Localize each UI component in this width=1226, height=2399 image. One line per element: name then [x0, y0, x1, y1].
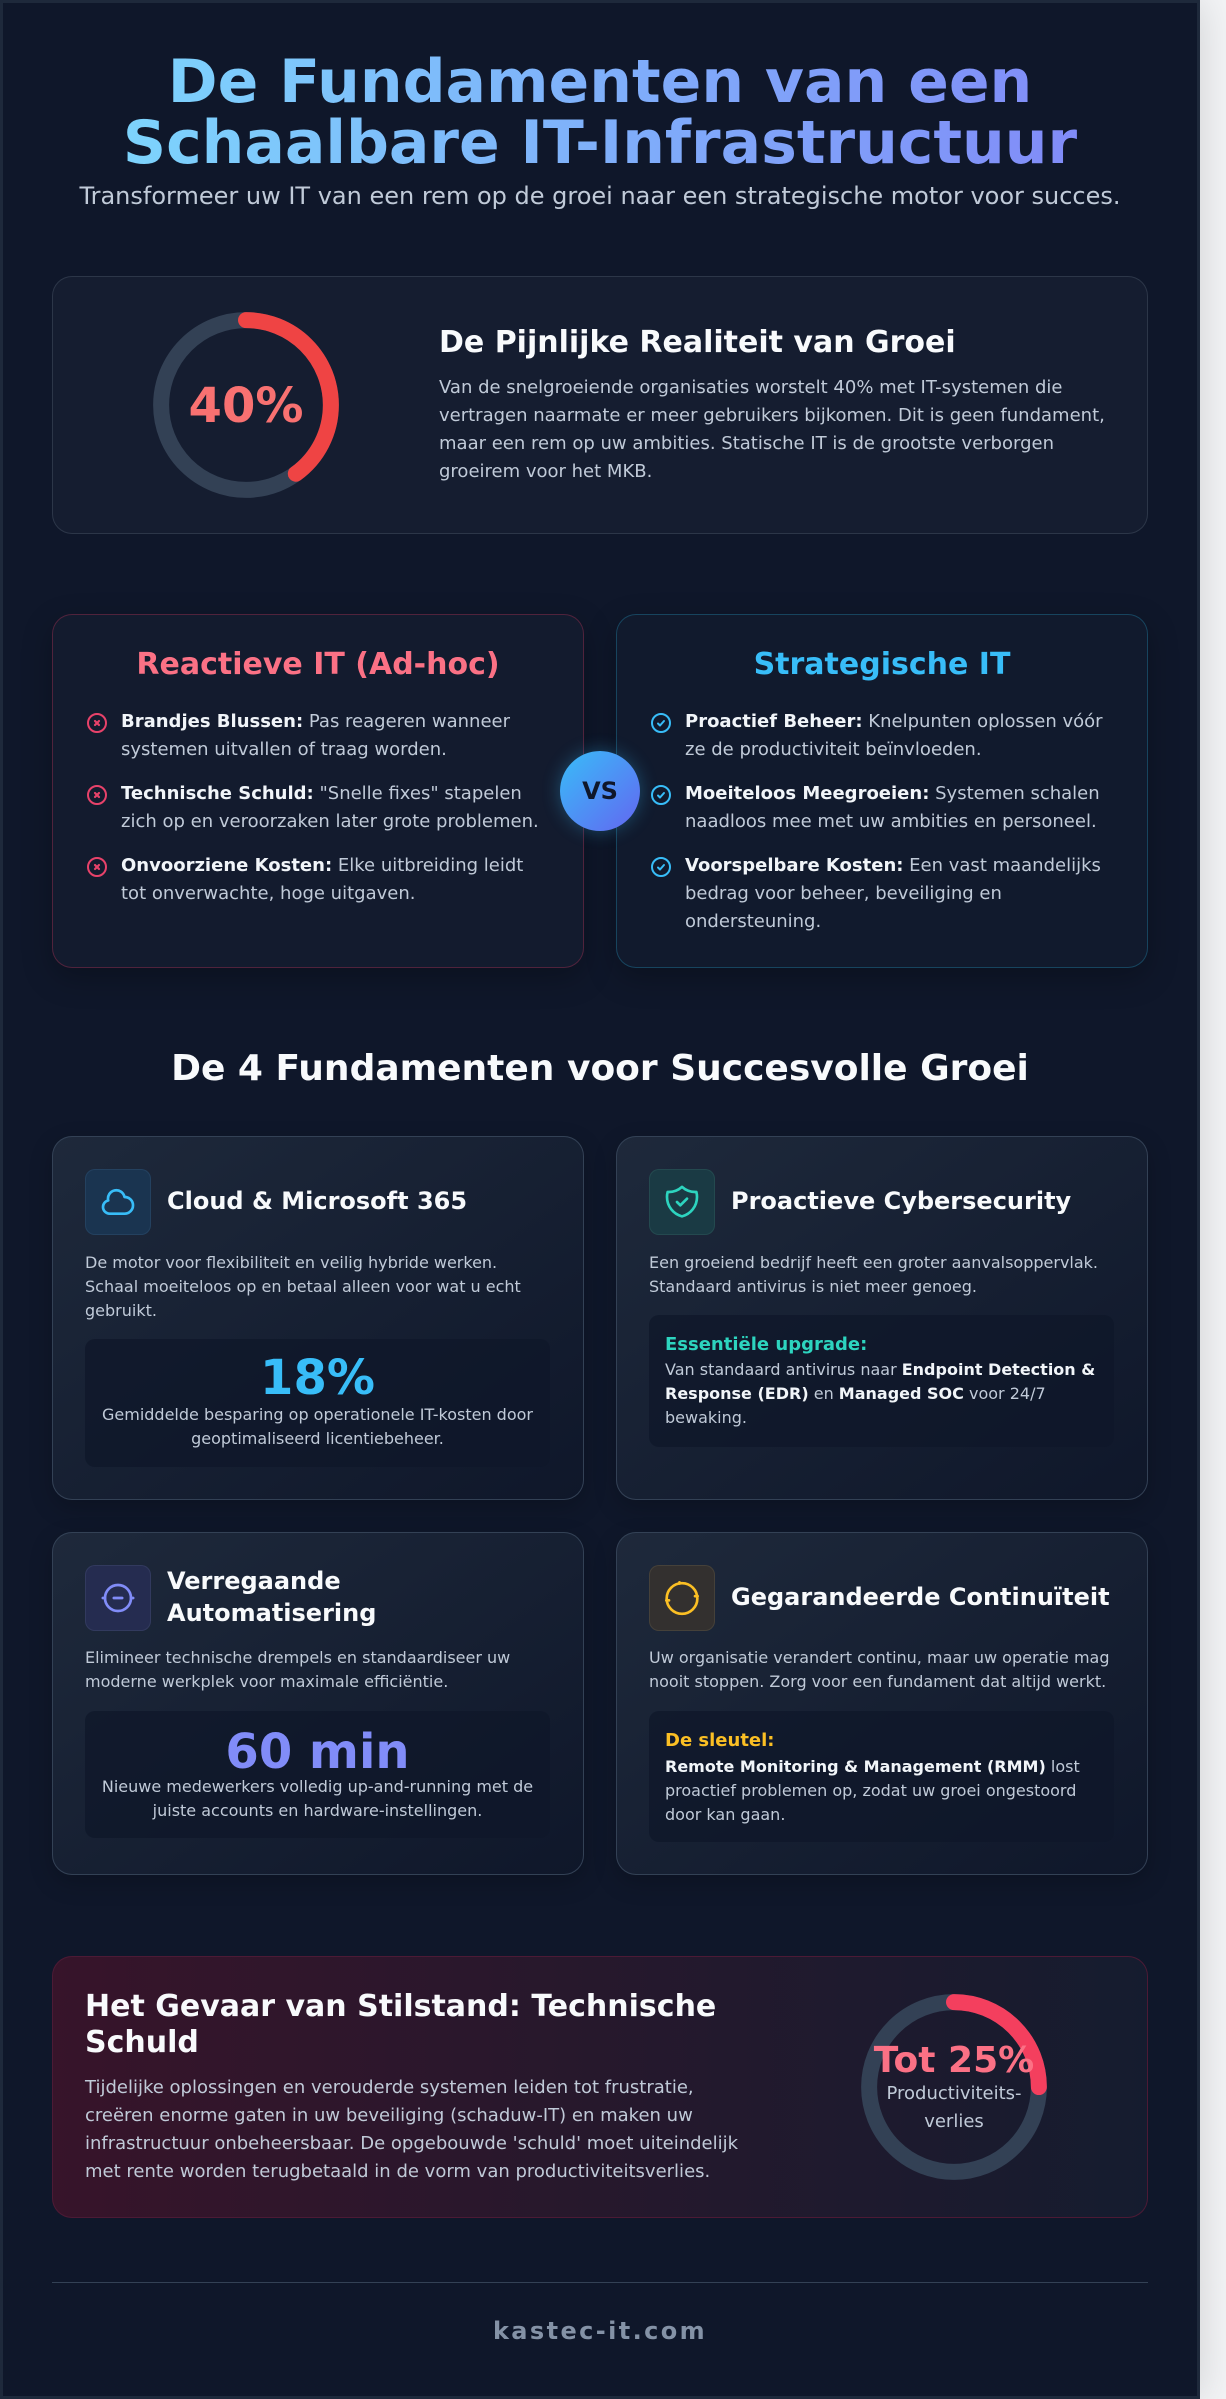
paragraph: met rente worden terugbetaald in de vorm van productiviteitsverlies. — [85, 2161, 710, 2182]
heading: Het Gevaar van Stilstand: Technische — [85, 1989, 716, 2024]
list item — [87, 711, 539, 904]
text: gebruikt. — [85, 1301, 157, 1320]
panel: automatisering — [52, 1532, 584, 1875]
text — [649, 1648, 1110, 1691]
text: Een groeiend bedrijf heeft een groter aanvalsoppervlak. — [649, 1253, 1098, 1272]
text — [85, 1253, 521, 1320]
heading: Gegarandeerde Continuïteit — [731, 1583, 1110, 1611]
text — [685, 783, 1100, 832]
icon: x — [87, 785, 107, 805]
chart: 25% donut — [861, 1994, 1047, 2180]
panel: cloud — [52, 1136, 584, 1500]
paragraph — [439, 377, 1105, 482]
text: Standaard antivirus is niet meer genoeg. — [649, 1277, 977, 1296]
icon: cloud — [85, 1169, 151, 1235]
website: kastec-it.com — [493, 2317, 707, 2345]
text: Technische Schuld: "Snelle fixes" stapelen — [121, 783, 522, 804]
icon: shield — [649, 1169, 715, 1235]
heading: reactieve: Reactieve IT (Ad-hoc) — [136, 647, 500, 682]
stat label — [886, 2083, 1022, 2132]
text: Moeiteloos Meegroeien: Systemen schalen — [685, 783, 1100, 804]
title: De Fundamenten van een — [168, 47, 1032, 117]
text: tot onverwachte, hoge uitgaven. — [121, 883, 415, 904]
text: naadloos mee met uw ambities en personeel. — [685, 811, 1097, 832]
stat label: verlies — [924, 2111, 984, 2132]
paragraph: maar een rem op uw ambities. Statische IT is de grootste verborgen — [439, 433, 1054, 454]
heading: Cloud & Microsoft 365 — [167, 1187, 467, 1215]
text — [685, 855, 1101, 932]
stat label: Productiviteits- — [886, 2083, 1022, 2104]
panel: pijnlijke realiteit — [52, 276, 1148, 534]
panel: continuiteit — [616, 1532, 1148, 1875]
callout text — [665, 1757, 1080, 1824]
panel: strategische IT — [616, 614, 1148, 968]
list items — [651, 711, 1103, 932]
panel: technische schuld — [52, 1956, 1148, 2218]
text: zich op en veroorzaken later grote problemen. — [121, 811, 539, 832]
stat box — [85, 1711, 550, 1838]
text — [85, 1648, 510, 1691]
stat: 60 min — [225, 1724, 410, 1780]
text: ondersteuning. — [685, 911, 821, 932]
text — [649, 1253, 1098, 1296]
heading — [85, 1989, 716, 2060]
text: Onvoorziene Kosten: Elke uitbreiding leidt — [121, 855, 523, 876]
text: Schaal moeiteloos op en betaal alleen voor wat u echt — [85, 1277, 521, 1296]
VS badge: VS — [582, 777, 618, 805]
paragraph — [84, 2077, 738, 2182]
callout box — [649, 1315, 1114, 1447]
text: Elimineer technische drempels en standaardiseer uw — [85, 1648, 510, 1667]
text: Voorspelbare Kosten: Een vast maandelijks — [685, 855, 1101, 876]
footer divider and url — [52, 2282, 1148, 2352]
callout text: bewaking. — [665, 1408, 747, 1427]
callout heading: De sleutel: — [665, 1730, 775, 1751]
icon: check — [651, 713, 671, 733]
panel: cybersecurity — [616, 1136, 1148, 1500]
heading — [167, 1567, 376, 1627]
stat label — [102, 1777, 533, 1820]
text — [121, 783, 539, 832]
heading: Proactieve Cybersecurity — [731, 1187, 1071, 1215]
text: nooit stoppen. Zorg voor een fundament dat altijd werkt. — [649, 1672, 1106, 1691]
paragraph: Tijdelijke oplossingen en verouderde systemen leiden tot frustratie, — [85, 2077, 694, 2098]
stat: 18% — [260, 1350, 375, 1406]
icon: check — [651, 785, 671, 805]
stat label: Gemiddelde besparing op operationele IT-kosten door — [102, 1405, 533, 1424]
icon: automation — [85, 1565, 151, 1631]
paragraph: creëren enorme gaten in uw beveiliging (schaduw-IT) en maken uw — [85, 2105, 693, 2126]
paragraph: infrastructuur onbeheersbaar. De opgebouwde 'schuld' moet uiteindelijk — [85, 2133, 738, 2154]
chart: 40% donut — [153, 312, 339, 498]
title — [52, 52, 1148, 174]
callout text: Response (EDR) en Managed SOC voor 24/7 — [665, 1384, 1046, 1403]
subtitle: Transformeer uw IT van een rem op de groei naar een strategische motor voor succes. — [79, 182, 1121, 210]
text: Uw organisatie verandert continu, maar uw operatie mag — [649, 1648, 1110, 1667]
stat label: juiste accounts en hardware-instellingen. — [153, 1801, 482, 1820]
VS badge — [560, 751, 640, 831]
icon: x — [87, 857, 107, 877]
icon: x — [87, 713, 107, 733]
text — [121, 711, 510, 760]
text — [685, 711, 1103, 760]
text: moderne werkplek voor maximale efficiëntie. — [85, 1672, 448, 1691]
icon: continuity — [649, 1565, 715, 1631]
text: ze de productiviteit beïnvloeden. — [685, 739, 982, 760]
callout heading: Essentiële upgrade: — [665, 1334, 867, 1355]
callout text: door kan gaan. — [665, 1805, 785, 1824]
callout text: proactief problemen op, zodat uw groei ongestoord — [665, 1781, 1076, 1800]
callout text: Remote Monitoring & Management (RMM) lost — [665, 1757, 1080, 1776]
paragraph: vertragen naarmate er meer gebruikers bijkomen. Dit is geen fundament, — [439, 405, 1105, 426]
text — [121, 855, 523, 904]
heading: strategische: Strategische IT — [754, 647, 1010, 682]
stat label: geoptimaliseerd licentiebeheer. — [191, 1429, 444, 1448]
heading: Verregaande — [167, 1567, 341, 1595]
heading: Schuld — [85, 2025, 199, 2060]
heading: De Pijnlijke Realiteit van Groei — [439, 325, 956, 360]
stat: 40%: 40% — [189, 378, 303, 434]
paragraph: Van de snelgroeiende organisaties worstelt 40% met IT-systemen die — [439, 377, 1062, 398]
callout text: Van standaard antivirus naar Endpoint Detection & — [665, 1360, 1095, 1379]
callout box — [649, 1711, 1114, 1842]
text: Brandjes Blussen: Pas reageren wanneer — [121, 711, 510, 732]
text: bedrag voor beheer, beveiliging en — [685, 883, 1002, 904]
text: Proactief Beheer: Knelpunten oplossen vóór — [685, 711, 1103, 732]
heading: Automatisering — [167, 1599, 376, 1627]
stat box — [85, 1339, 550, 1467]
section heading: De 4 Fundamenten voor Succesvolle Groei — [171, 1048, 1029, 1089]
panel: reactieve IT — [52, 614, 584, 968]
stat label: Nieuwe medewerkers volledig up-and-running met de — [102, 1777, 533, 1796]
stat label — [102, 1405, 533, 1448]
title: Schaalbare IT-Infrastructuur — [123, 108, 1077, 178]
paragraph: groeirem voor het MKB. — [439, 461, 652, 482]
stat: tot 25%: Tot 25% — [874, 2040, 1034, 2081]
text: De motor voor flexibiliteit en veilig hybride werken. — [85, 1253, 497, 1272]
icon: check — [651, 857, 671, 877]
callout text — [665, 1360, 1095, 1427]
text: systemen uitvallen of traag worden. — [121, 739, 447, 760]
